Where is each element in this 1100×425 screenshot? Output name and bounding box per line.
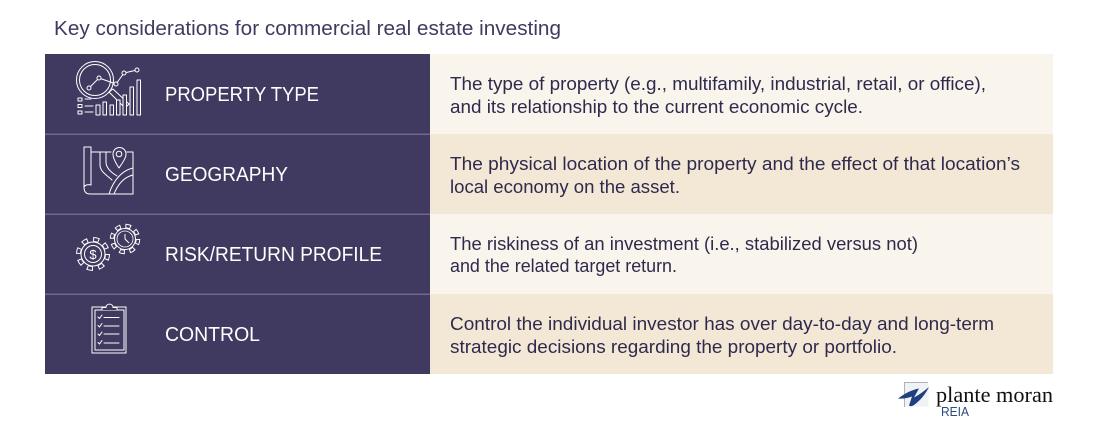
label: geography: GEOGRAPHY (165, 164, 288, 186)
description: property type (450, 74, 986, 117)
description: risk/return profile: and the related target return. (450, 256, 677, 276)
label: property type: PROPERTY TYPE (165, 84, 319, 106)
logo: plante moran REIA (898, 382, 1053, 419)
description: control: Control the individual investor has over day-to-day and long-term (450, 314, 994, 334)
description: geography (450, 154, 1020, 197)
panel: property type row (45, 54, 1053, 134)
description: risk/return profile (450, 234, 918, 276)
description: geography: The physical location of the property and the effect of that location’s (450, 154, 1020, 174)
icon: gears with dollar and clock: $ (89, 247, 97, 262)
sub-brand: REIA (941, 405, 970, 419)
icon: gears with dollar and clock (78, 226, 138, 268)
icon: magnifier with charts (76, 62, 140, 115)
icon: logo mark (898, 382, 929, 407)
panel: geography row (45, 134, 1053, 214)
title: Key considerations for commercial real estate investing (54, 18, 561, 40)
description: property type: The type of property (e.g., multifamily, industrial, retail, or office), (450, 74, 986, 94)
label: risk/return profile: RISK/RETURN PROFILE (165, 244, 382, 266)
label: control: CONTROL (165, 324, 260, 346)
description: risk/return profile: The riskiness of an investment (i.e., stabilized versus not) (450, 234, 918, 254)
description: geography: local economy on the asset. (450, 177, 680, 197)
description: control (450, 314, 994, 357)
panel: control row (45, 294, 1053, 374)
panel: risk/return row (45, 214, 1053, 294)
icon: map with pin (84, 147, 133, 194)
description: property type: and its relationship to the current economic cycle. (450, 97, 863, 117)
wordmark: plante moran (936, 382, 1053, 407)
icon: clipboard checklist (92, 304, 126, 353)
description: control: strategic decisions regarding the property or portfolio. (450, 337, 897, 357)
